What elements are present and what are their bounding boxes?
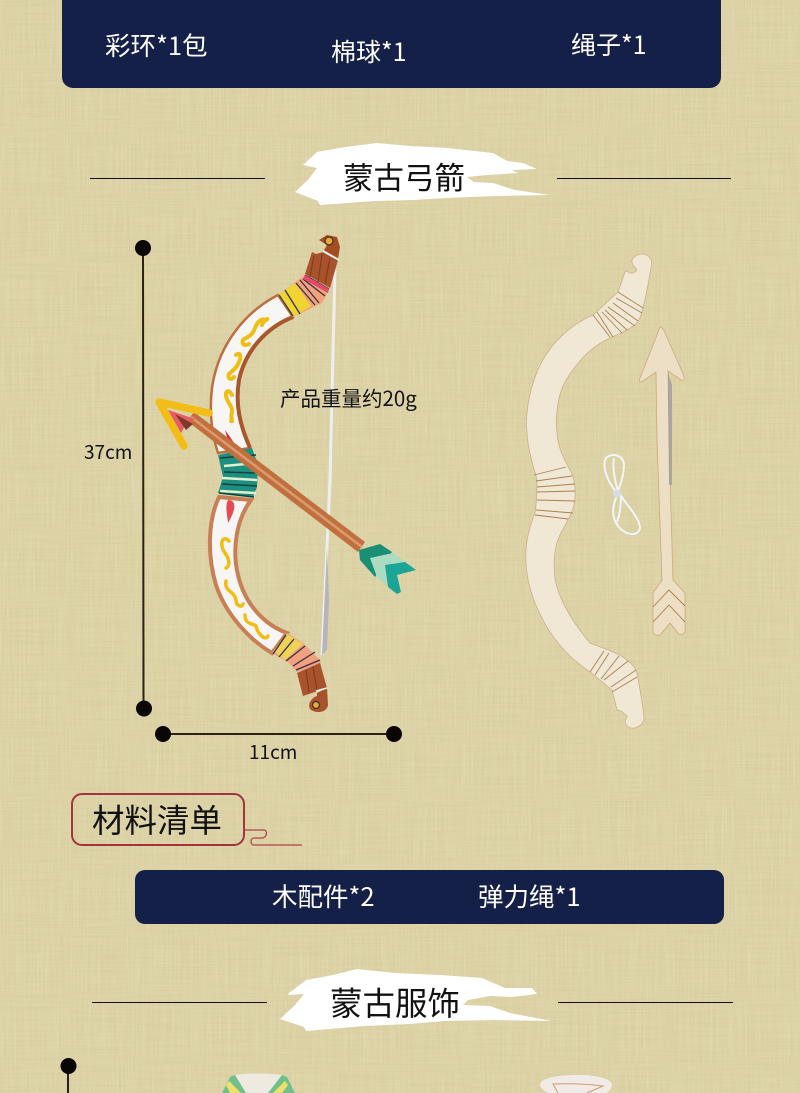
wooden bow blank [526,254,685,728]
lower wrap [272,633,321,672]
section rule lines: 蒙古服饰 [92,1002,733,1004]
blank arrow [639,327,685,635]
heading: 蒙古服饰: 蒙古服饰 [330,978,460,1025]
dimension: height line [135,240,152,716]
badge: 材料清单 [71,793,245,846]
elastic cord knot [613,490,621,498]
costume hat top [540,1075,612,1093]
upper wrap [278,275,329,317]
material: 彩环: 彩环*1包 [105,26,208,63]
upper knob [319,235,340,259]
lower limb [210,497,287,653]
materials panel [135,870,724,924]
heading brush: 蒙古服饰 [280,969,551,1031]
bottom dimension stub [60,1058,76,1093]
grip wrap [218,448,258,497]
upper limb red mark [225,430,237,448]
badge connector flourish [244,830,302,845]
section rule lines: 蒙古弓箭 [90,178,731,180]
lower knob [309,688,328,712]
material: 弹力绳: 弹力绳*1 [478,877,581,914]
blank arrow engraved chevrons [653,590,685,622]
arrow fletching [359,544,392,577]
painted bow [159,235,416,712]
upper limb scrolls [226,319,267,421]
material: 绳子: 绳子*1 [571,26,647,62]
top materials panel [62,0,721,88]
material: 木配件: 木配件*2 [272,877,375,914]
label: height: 37cm [84,438,132,465]
label: width: 11cm [249,738,297,765]
lower limb red mark [226,500,234,523]
upper tail [305,252,338,288]
elastic cord [604,455,640,534]
heading brush: 蒙古弓箭 [295,143,550,205]
blank engraved lines [534,292,643,692]
arrow shaft [187,412,365,552]
costume garment top [222,1074,295,1093]
label: weight: 产品重量约20g [280,382,417,412]
heading: 蒙古弓箭: 蒙古弓箭 [343,154,465,198]
upper limb [211,295,293,453]
bow string [322,268,335,655]
material: 棉球: 棉球*1 [331,33,407,69]
badge text: 材料清单 [92,795,222,842]
lower limb scrolls [222,539,268,638]
arrow head [159,402,209,446]
dimension: width line [155,726,402,742]
lower tail [297,663,327,696]
